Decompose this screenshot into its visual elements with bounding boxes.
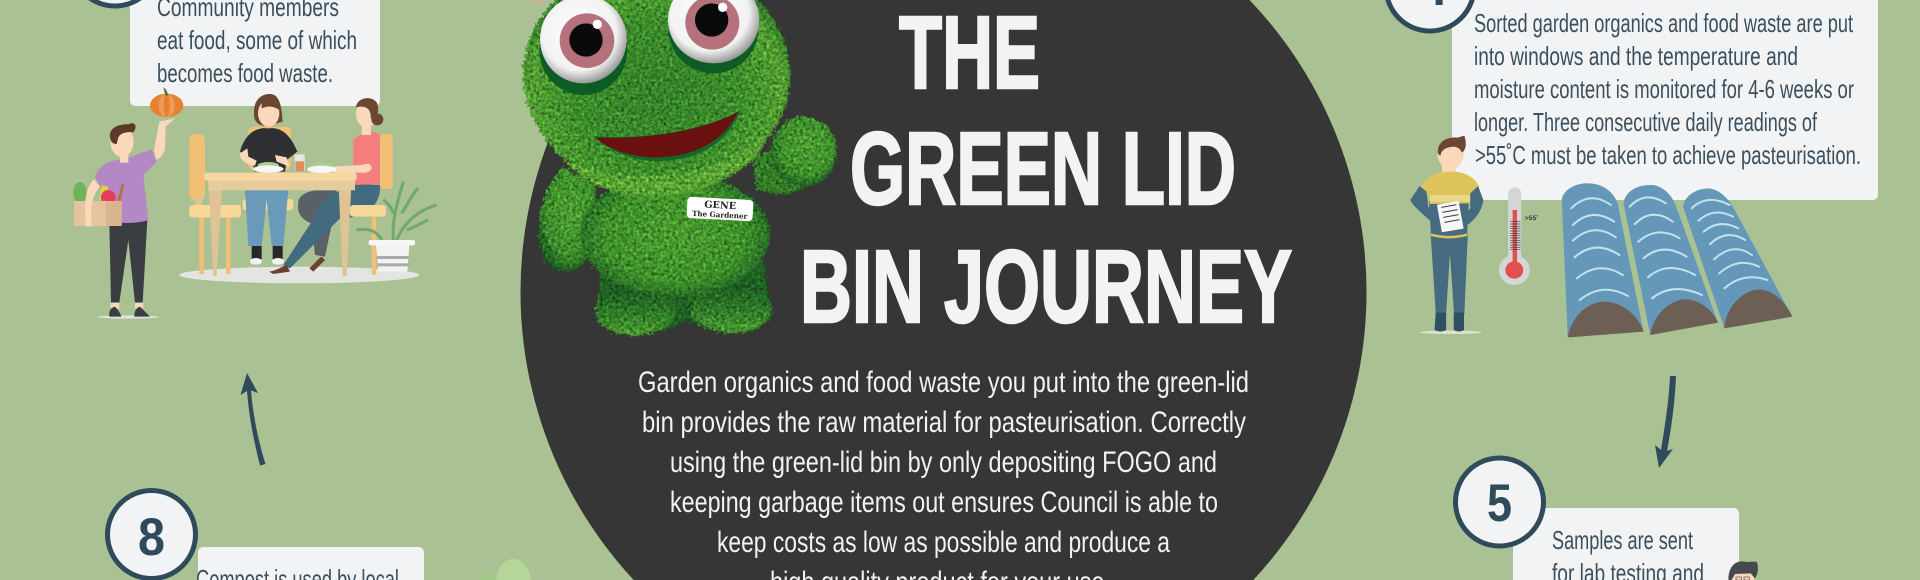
step 8 number circle	[108, 490, 196, 578]
intro paragraph: bin provides the raw material for pasteurisation. Correctly	[642, 406, 1246, 439]
step 3 number circle	[71, 0, 159, 6]
name badge	[687, 197, 754, 221]
step 8 card	[196, 547, 424, 580]
arrow: step 8 to step 3	[240, 373, 266, 466]
name badge: GENE	[704, 200, 736, 212]
step 5 card: Samples are sent	[1552, 525, 1694, 555]
icon: thermometer	[1499, 187, 1539, 285]
step 5 card	[1513, 508, 1739, 580]
step 4 card: into windows and the temperature and	[1474, 41, 1798, 71]
step 3 card: becomes food waste.	[157, 58, 333, 88]
title: GREEN LID	[850, 111, 1236, 226]
icon: plates and glass	[253, 154, 336, 173]
title: BIN JOURNEY	[800, 229, 1292, 344]
intro paragraph: keep costs as low as possible and produce a	[717, 526, 1170, 559]
intro paragraph: Garden organics and food waste you put into the green-lid	[638, 366, 1249, 399]
step 4 illustration: windrows	[1410, 136, 1792, 337]
icon: pumpkin	[150, 87, 183, 117]
icon: potted plant	[357, 182, 437, 272]
icon: windrow piles	[1562, 183, 1792, 337]
icon: table and chairs	[189, 134, 393, 276]
title	[800, 0, 1292, 344]
intro paragraph	[638, 366, 1249, 580]
step 5 number circle: 5	[1487, 474, 1512, 533]
central dark circle	[520, 0, 1366, 580]
step 3 card: eat food, some of which	[157, 25, 357, 55]
step 3 card	[130, 0, 380, 106]
step 8 plant foliage	[480, 559, 531, 580]
intro paragraph: keeping garbage items out ensures Council is able to	[670, 486, 1218, 519]
arrow: step 4 to step 5	[1655, 376, 1676, 468]
monster mascot: Gene the Gardener	[523, 0, 837, 336]
name badge: The Gardener	[692, 209, 748, 221]
step 5 number circle	[1456, 458, 1544, 546]
step 8 number circle: 8	[138, 508, 165, 567]
icon: woman in red shirt	[269, 98, 383, 274]
step 5 lab worker head	[1728, 561, 1758, 580]
icon: man with clipboard	[1410, 136, 1483, 334]
icon: thermometer: >55˚	[1525, 214, 1539, 222]
intro paragraph: using the green-lid bin by only depositing FOGO and	[670, 446, 1217, 479]
icon: woman in black shirt	[240, 94, 297, 265]
icon: man with pumpkin and groceries	[73, 118, 175, 317]
step 4 number circle	[1386, 0, 1474, 31]
step 3 illustration: community eating	[73, 87, 437, 319]
step 4 card	[1452, 0, 1878, 200]
